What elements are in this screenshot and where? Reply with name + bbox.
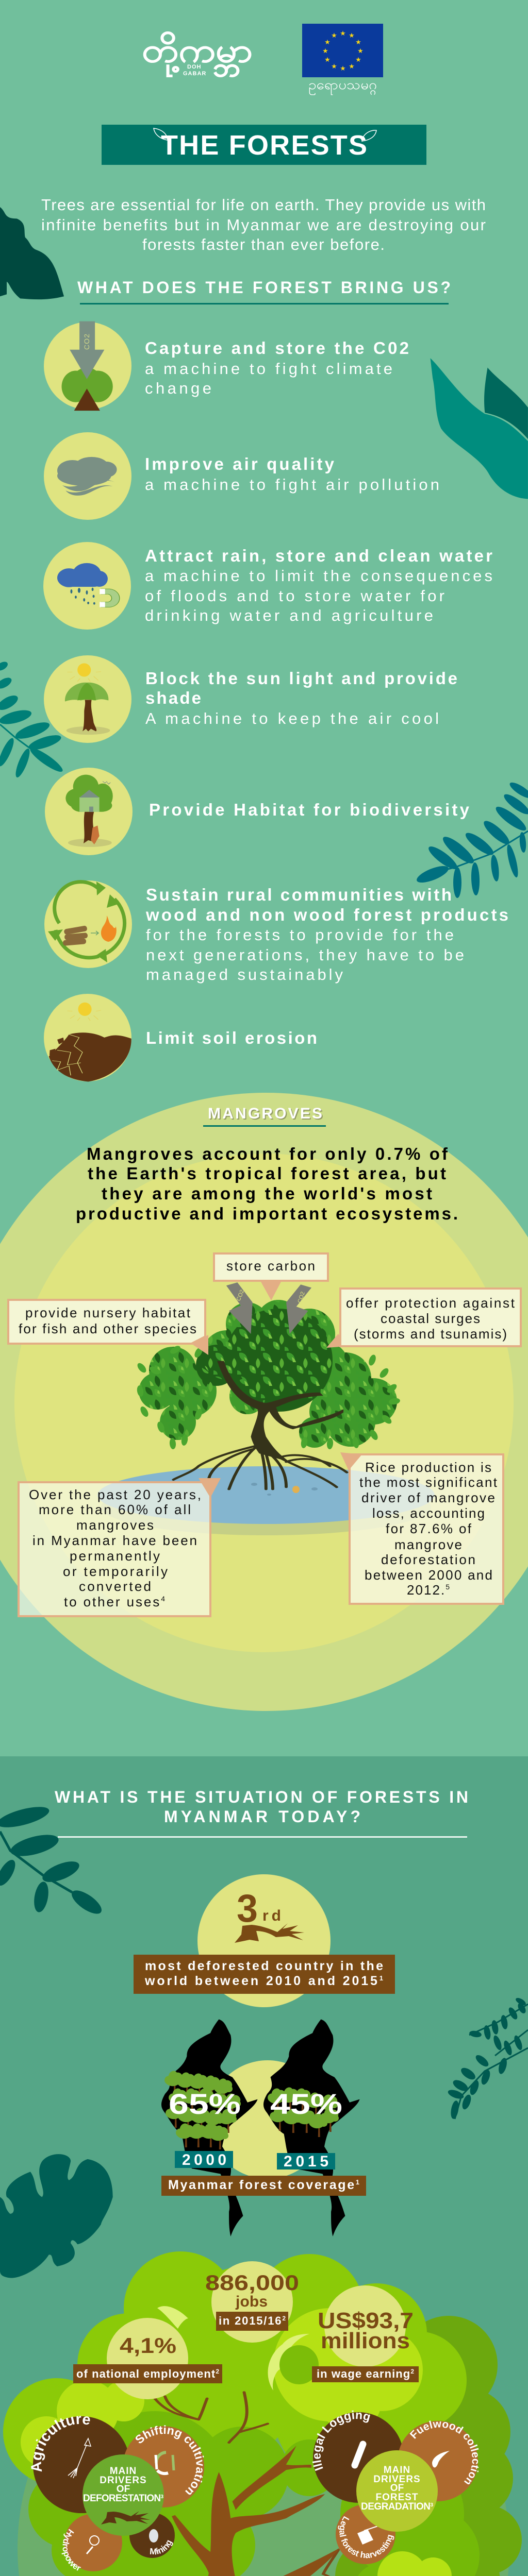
callout: rice production: the most significant [359, 1475, 498, 1490]
text: block the sun [145, 669, 457, 727]
text: mangrove statement [76, 1144, 458, 1223]
logo: European Union flag: ★ [349, 31, 355, 39]
icon: smog cloud [44, 432, 131, 520]
stat: 4,1% of national employment: 2 [216, 2368, 219, 2375]
logo: Doh Gabar: DOH [187, 64, 201, 70]
center: main drivers of forest degradation [356, 2450, 438, 2532]
heading: what does the forest bring us: WHAT DOES THE FOREST BRING US? [77, 278, 451, 297]
icon: cycle of wood products [44, 880, 132, 968]
intro text: Trees are essential for life on earth. They provide us with [41, 196, 486, 214]
background: top section [0, 0, 528, 1756]
callout: rice production: between 2000 and [365, 1567, 492, 1583]
logo: Doh Gabar: တို့ကမ္ဘာ [142, 30, 253, 78]
panel: mangroves [0, 1093, 528, 1711]
center: main drivers of forest degradation: FOREST [375, 2492, 419, 2503]
logo: European Union flag: ★ [324, 38, 331, 46]
text: attract rain: of floods and to store water for [145, 587, 444, 605]
driver: agriculture [31, 2416, 127, 2513]
driver: fuelwood collection [399, 2420, 478, 2501]
stat: US$93,7 millions: 2 [410, 2368, 414, 2375]
text: capture and store: change [145, 379, 211, 397]
icon: sun and umbrella tree [44, 655, 131, 743]
text: mangrove statement: Mangroves account for only 0.7% of [87, 1144, 448, 1163]
map: forest coverage 2015: 45% [270, 2088, 342, 2120]
map: forest coverage 2015: 2015 [284, 2153, 328, 2170]
text: capture and store: a machine to fight climate [145, 360, 392, 378]
center: main drivers of forest degradation: OF [390, 2483, 404, 2494]
banner: forest coverage: Myanmar forest coverage [168, 2178, 354, 2192]
stat: 4,1% of national employment [73, 2318, 222, 2399]
text: block the sun: shade [145, 688, 201, 707]
center: main drivers of forest degradation: DRIVERS [373, 2474, 421, 2485]
ground circle [18, 2302, 509, 2576]
text: block the sun: Block the sun light and provide [145, 669, 457, 688]
decorative leaf: top left [0, 207, 64, 299]
heading: situation of forests: WHAT IS THE SITUATION OF FORESTS IN [55, 1788, 468, 1806]
stat: 886,000 jobs: 886,000 [205, 2270, 299, 2295]
heading: situation of forests: MYANMAR TODAY? [164, 1807, 360, 1826]
benefit: rural communities [44, 880, 508, 984]
logo: European Union flag: ★ [355, 56, 361, 63]
driver: hydropower: Hydropower [61, 2529, 81, 2571]
callout: nursery habitat [8, 1300, 208, 1355]
stat: US$93,7 millions: US$93,7 [318, 2308, 414, 2333]
heading: mangroves: MANGROVES [209, 1106, 323, 1123]
callout: rice production [340, 1452, 503, 1604]
decorative fern: right [415, 780, 528, 898]
callout: rice production: loss, accounting [372, 1505, 485, 1521]
map: forest coverage 2000 [161, 2020, 258, 2236]
callout: rice production: 5 [446, 1583, 450, 1591]
callout: past 20 years: permanently [70, 1548, 160, 1564]
callout: past 20 years: Over the past 20 years, [29, 1487, 201, 1502]
center: main drivers of forest degradation: 3 [430, 2502, 433, 2508]
callout: past 20 years: or temporarily [63, 1564, 168, 1579]
stat: US$93,7 millions: millions [321, 2328, 410, 2353]
icon: CO2 arrow into tree: CO2 [82, 334, 91, 350]
stat: 886,000 jobs [205, 2261, 299, 2343]
intro text [41, 196, 486, 253]
intro text: infinite benefits but in Myanmar we are destroying our [41, 216, 486, 234]
logo: European Union flag: ★ [324, 56, 331, 63]
callout: rice production: 2012. [407, 1582, 444, 1598]
decorative leaves: right [431, 358, 528, 499]
center: main drivers of forest degradation: DEGRADATION [361, 2501, 431, 2512]
background: situation section [0, 1756, 528, 2576]
text: capture and store [145, 338, 409, 397]
stat: 886,000 jobs: in 2015/16 [219, 2314, 282, 2327]
text: attract rain: a machine to limit the consequences [145, 567, 492, 585]
banner: forest coverage: 1 [356, 2178, 359, 2186]
callout: nursery habitat: provide nursery habitat [25, 1305, 191, 1320]
callout: past 20 years: more than 60% of all [39, 1502, 191, 1517]
driver: legal forest harvesting: Legal forest harvesting [338, 2516, 394, 2558]
logo: European Union flag: ဥရောပသမဂ္ဂ [308, 78, 377, 95]
illustration: mangrove tree [136, 1300, 401, 1489]
text: habitat: Provide Habitat for biodiversity [149, 800, 470, 819]
illustration: forest tree with statistics [3, 2251, 522, 2576]
logo: European Union flag [302, 24, 383, 95]
text: improve air quality [145, 454, 439, 494]
driver: illegal logging [312, 2410, 402, 2503]
text: mangrove statement: productive and important ecosystems. [76, 1204, 458, 1223]
illustration: pond [97, 1466, 435, 1535]
icon: yellow circle with stump [197, 1874, 331, 2007]
center: main drivers of deforestation: 3 [160, 2494, 163, 2500]
callout: rice production: mangrove [394, 1537, 462, 1552]
title banner: THE FORESTS [161, 130, 367, 161]
diagram: main drivers of forest degradation [312, 2410, 478, 2564]
driver: agriculture: Agriculture [31, 2416, 90, 2472]
text: mangrove statement: the Earth's tropical forest area, but [88, 1164, 446, 1183]
callout: coastal protection: (storms and tsunamis) [354, 1326, 507, 1342]
benefit: improve air quality [44, 432, 439, 520]
banner: most deforested: world between 2010 and 2015 [145, 1974, 377, 1988]
callout: past 20 years: 4 [161, 1595, 165, 1603]
text: capture and store: Capture and store the C02 [145, 338, 409, 358]
text: rural communities: for the forests to provide for the [146, 926, 454, 944]
driver: mining: Mining [150, 2540, 173, 2554]
callout: rice production: Rice production is [365, 1460, 491, 1475]
logo: Doh Gabar: GABAR [183, 71, 206, 77]
logo: European Union flag: ★ [357, 47, 364, 55]
stat: US$93,7 millions: in wage earning [317, 2367, 410, 2380]
stat: 4,1% of national employment: 4,1% [120, 2333, 176, 2358]
text: block the sun: A machine to keep the air cool [145, 709, 439, 727]
banner: most deforested [134, 1955, 395, 1994]
decorative fern: section right [447, 1996, 528, 2120]
callout: past 20 years: to other uses [64, 1594, 159, 1609]
icon: CO2 arrows into mangrove [226, 1282, 311, 1334]
logo: European Union flag: ★ [355, 38, 361, 46]
center: main drivers of forest degradation: MAIN [384, 2465, 410, 2476]
header logos [142, 24, 383, 95]
tree trunk and branches [133, 2392, 362, 2576]
center: main drivers of deforestation: DRIVERS [100, 2475, 147, 2486]
decorative fern: section left [0, 1803, 105, 1918]
benefit: soil erosion [44, 994, 317, 1082]
intro text: forests faster than ever before. [142, 235, 385, 253]
pale circle behind maps [208, 2060, 327, 2179]
chart: Myanmar forest coverage maps [161, 2020, 366, 2236]
icon: CO2 arrows into mangrove: CO2 [296, 1291, 306, 1304]
stat: 4,1% of national employment: of national employment [76, 2367, 215, 2380]
driver: fuelwood collection: Fuelwood collection [409, 2420, 478, 2484]
callout: store carbon [214, 1253, 328, 1300]
logo: European Union flag: ★ [322, 47, 328, 55]
map: forest coverage 2015 [263, 2020, 360, 2236]
icon: tree with house [45, 768, 133, 855]
benefit: capture CO2 [44, 321, 409, 411]
benefit: attract rain [43, 542, 492, 630]
text: rural communities: next generations, they have to be [146, 946, 464, 964]
callout: store carbon: store carbon [226, 1258, 315, 1274]
center: main drivers of deforestation [82, 2454, 164, 2536]
benefit: habitat [45, 768, 470, 855]
decorative fern: left [0, 660, 65, 779]
icon: rain cloud and magnet [43, 542, 131, 630]
logo: European Union flag: ★ [340, 64, 346, 72]
text: rural communities: Sustain rural communities with [146, 885, 452, 904]
logo: European Union flag: ★ [349, 62, 355, 70]
benefit: block the sun [44, 655, 457, 743]
text: mangrove statement: they are among the world's most [102, 1184, 432, 1203]
text: attract rain: Attract rain, store and clean water [145, 546, 492, 565]
logo: European Union flag: ★ [340, 29, 346, 37]
text: rural communities: wood and non wood forest products [145, 905, 508, 924]
callout: coastal protection: coastal surges [381, 1311, 480, 1326]
stat: US$93,7 millions [312, 2285, 419, 2382]
diagram: main drivers of deforestation [31, 2416, 204, 2571]
callout: rice production: for 87.6% of [386, 1521, 472, 1536]
callout: rice production: deforestation [381, 1552, 475, 1567]
tree canopy [3, 2251, 522, 2576]
center: main drivers of deforestation: OF [117, 2484, 130, 2495]
stat: 886,000 jobs: jobs [235, 2293, 268, 2310]
center: main drivers of deforestation: DEFORESTATION [83, 2493, 161, 2504]
icon: CO2 arrows into mangrove: CO2 [236, 1289, 245, 1302]
callout: past 20 years: mangroves [76, 1517, 154, 1533]
callout: past 20 years: in Myanmar have been [32, 1533, 197, 1548]
text: attract rain: drinking water and agriculture [145, 606, 433, 624]
icon: CO2 arrow into tree [44, 321, 131, 411]
driver: shifting cultivation: Shifting cultivation [136, 2425, 204, 2495]
map: forest coverage 2000: 65% [169, 2088, 241, 2120]
banner: most deforested: most deforested country in the [145, 1959, 383, 1973]
center: main drivers of deforestation: MAIN [110, 2466, 137, 2477]
text: improve air quality: Improve air quality [145, 454, 335, 473]
driver: illegal logging: Illegal Logging [312, 2410, 370, 2471]
map: forest coverage 2000: 2000 [182, 2151, 226, 2168]
heading: situation of forests [55, 1788, 468, 1838]
banner: most deforested: 1 [380, 1974, 383, 1982]
logo: European Union flag: ★ [331, 62, 337, 70]
icon: yellow circle with stump: 3 [237, 1887, 258, 1930]
callout: nursery habitat: for fish and other species [19, 1321, 196, 1336]
icon: eroding hillside [44, 994, 131, 1082]
banner: forest coverage [161, 2176, 366, 2196]
callout: past 20 years: converted [79, 1579, 151, 1594]
logo: European Union flag: ★ [331, 31, 337, 39]
text: improve air quality: a machine to fight air pollution [145, 476, 439, 494]
driver: mining [129, 2514, 175, 2558]
mangrove background circles [0, 1093, 528, 1711]
callout: rice production: driver of mangrove [361, 1490, 495, 1505]
driver: hydropower [61, 2514, 122, 2571]
title banner [102, 125, 426, 165]
text: rural communities: managed sustainably [146, 965, 343, 984]
text: attract rain [145, 546, 492, 624]
text: soil erosion: Limit soil erosion [146, 1028, 317, 1047]
callout: coastal protection [326, 1289, 521, 1348]
callout: past 20 years [19, 1478, 221, 1616]
stat: 886,000 jobs: 2 [282, 2315, 286, 2322]
heading: mangroves: MANGROVES [208, 1105, 322, 1122]
decorative leaf: section left lobed [0, 2154, 113, 2278]
icon: yellow circle with stump: rd [262, 1907, 281, 1924]
callout: coastal protection: offer protection against [346, 1295, 515, 1311]
text: rural communities [145, 885, 508, 984]
stat: third most deforested [134, 1874, 395, 2007]
